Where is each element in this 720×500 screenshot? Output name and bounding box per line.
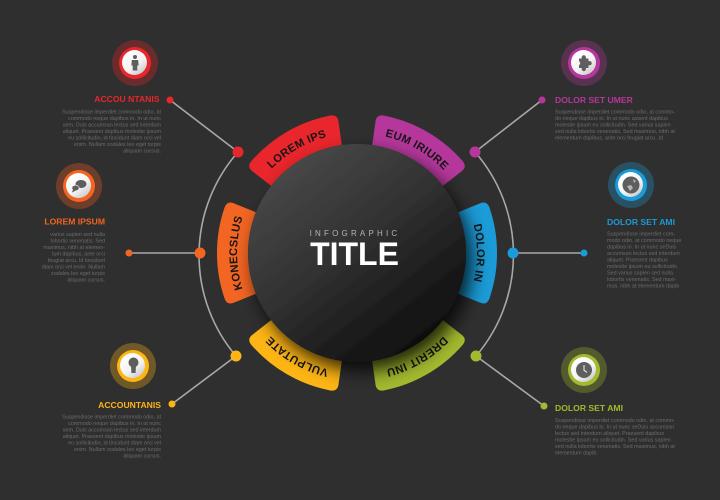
text block: DOLOR SET UMER: elementum dapibus, ante orci feugiat arcu. Id [555,136,663,142]
text block: LOREM IPSUM: lobortis venenatis. Sed [50,238,105,244]
text block: LOREM IPSUM: sodales leo eget turpis [51,271,105,277]
segment: VULPUTATE [249,320,342,391]
text block: DOLOR SET AMI (blue): Suspendisse imperdiet com- [607,232,675,238]
icon: puzzle piece [561,40,607,86]
segment: EUM IRIURE: EUM IRIURE [386,129,449,170]
text block: DOLOR SET UMER: do neque dapibus in. In ut nunc assent dapibus [555,116,668,122]
text block: DOLOR SET AMI (blue): modo odio, at commodo neque [607,238,681,244]
text block: ACCOUNTANIS: enim. Nullam sodales leo eget turpis [74,447,161,453]
text block: LOREM IPSUM: LOREM IPSUM [44,216,105,226]
icon: light bulb [110,343,156,389]
text block: DOLOR SET AMI (green): do neque dapibus in. In ut nunc seDuis accumsan [555,424,674,430]
text block: ACCOUNTANIS: aliquam cursus. [123,454,161,460]
text block: ACCOU NTANIS: ACCOU NTANIS [94,94,160,104]
connector ring: right arc [475,152,513,356]
text block: DOLOR SET UMER: DOLOR SET UMER [555,95,634,105]
icon: person [112,40,158,86]
connector: yellow [168,350,242,408]
text block: DOLOR SET UMER [555,95,675,142]
text block: ACCOU NTANIS: aliquam cursus. [123,148,161,154]
text block: LOREM IPSUM [42,216,105,284]
text block: LOREM IPSUM: tum dapibus, ante orci [52,252,105,258]
text block: LOREM IPSUM: maximus, nibh at elemen- [43,245,105,251]
connector: purple [470,96,546,158]
text block: DOLOR SET AMI (blue): aliquet. Praesent dapibus [607,258,668,264]
segment: KONECSLUS: KONECSLUS [229,216,242,290]
text block: DOLOR SET AMI (green): Suspendisse imperdiet commodo odio, at commo- [555,418,675,424]
text block: ACCOU NTANIS [62,94,161,154]
text block: LOREM IPSUM: varius sapien sed nulla [50,232,105,238]
text block: DOLOR SET UMER: Suspendisse imperdiet commodo odio, at commo- [555,110,675,116]
text block: ACCOUNTANIS: Suspendisse imperdiet commodo odio, at [62,414,161,420]
segment: DRERIT INU: DRERIT INU [388,336,448,377]
segment: LOREM IPS: LOREM IPS [266,130,326,168]
connector: blue [508,248,588,258]
segment: DOLOR IN [458,202,498,304]
text block: DOLOR SET UMER: molestie ipsum eu sollicitudin. Sed varius sapien [555,122,671,128]
text block: ACCOU NTANIS: commodo neque dapibus in. In ut nunc [68,116,161,122]
segment: DOLOR IN: DOLOR IN [474,224,485,282]
icon: speech bubbles [56,163,102,209]
text block: ACCOUNTANIS: eu sollicitudin, id tincidunt diam orci vel [68,440,161,446]
text block: ACCOU NTANIS: Suspendisse imperdiet commodo odio, at [62,110,161,116]
segment: EUM IRIURE [372,115,465,186]
text block: DOLOR SET AMI (blue): Sed varius sapien sed nulla [607,270,673,276]
icon: globe [608,162,654,208]
text block: ACCOUNTANIS: ACCOUNTANIS [98,400,161,410]
text block: DOLOR SET AMI (green): elementum dapib [555,450,596,456]
text block: LOREM IPSUM: diam orci vel enim. Nullam [42,264,105,270]
text block: ACCOU NTANIS: aliquet. Praesent dapibus molestie ipsum [63,129,161,135]
text block: DOLOR SET AMI (blue): lobortis venenatis. Sed maxi- [607,277,676,283]
connector ring: left arc [199,152,238,356]
text block: DOLOR SET AMI (green): lectus sed interdum aliquet. Praesent dapibus [555,431,664,437]
text block: LOREM IPSUM: aliquam cursus. [67,278,105,284]
text block: DOLOR SET AMI (blue) [607,217,681,290]
segment: VULPUTATE: VULPUTATE [266,336,326,377]
text block: DOLOR SET AMI (green) [555,403,675,456]
segment: KONECSLUS [216,202,256,304]
central disc [248,144,466,362]
text block: ACCOUNTANIS: commodo neque dapibus in. In ut nunc [68,421,161,427]
text block: LOREM IPSUM: feugiat arcu. Id tincidunt [48,258,105,264]
text block: ACCOUNTANIS [62,400,161,460]
segment: LOREM IPS [249,115,342,186]
text block: DOLOR SET AMI (green): DOLOR SET AMI [555,403,623,413]
text block: DOLOR SET AMI (blue): accumsan lectus sed interdum [607,251,680,257]
text block: DOLOR SET AMI (green): sed nulla lobortis venenatis. Sed maximus, nibh at [555,444,675,450]
connector: orange [126,248,206,258]
title: TITLE [310,236,399,272]
text block: ACCOUNTANIS: sem. Duis accumsan lectus sed interdum [63,428,161,434]
icon: clock [561,347,607,393]
text block: DOLOR SET AMI (blue): DOLOR SET AMI [607,217,675,227]
connector: red [166,96,244,158]
text block: DOLOR SET AMI (blue): mus, nibh at elementum dapib [607,284,679,290]
text block: DOLOR SET UMER: sed nulla lobortis venenatis. Sed maximus, nibh at [555,129,675,135]
text block: DOLOR SET AMI (blue): molestie ipsum eu sollicitudin. [607,264,678,270]
text block: ACCOU NTANIS: enim. Nullam sodales leo eget turpis [74,142,161,148]
text block: ACCOU NTANIS: sem. Duis accumsan lectus sed interdum [63,122,161,128]
text block: ACCOU NTANIS: eu sollicitudin, id tincidunt diam orci vel [68,136,161,142]
eyebrow: INFOGRAPHIC: INFOGRAPHIC [310,229,400,238]
text block: DOLOR SET AMI (blue): dapibus in. In ut nunc seDuis [607,244,677,250]
text block: DOLOR SET AMI (green): molestie ipsum eu sollicitudin. Sed varius sapien [555,438,671,444]
text block: ACCOUNTANIS: aliquet. Praesent dapibus molestie ipsum [63,434,161,440]
connector: green [470,350,548,410]
segment: DRERIT INU [372,320,465,391]
